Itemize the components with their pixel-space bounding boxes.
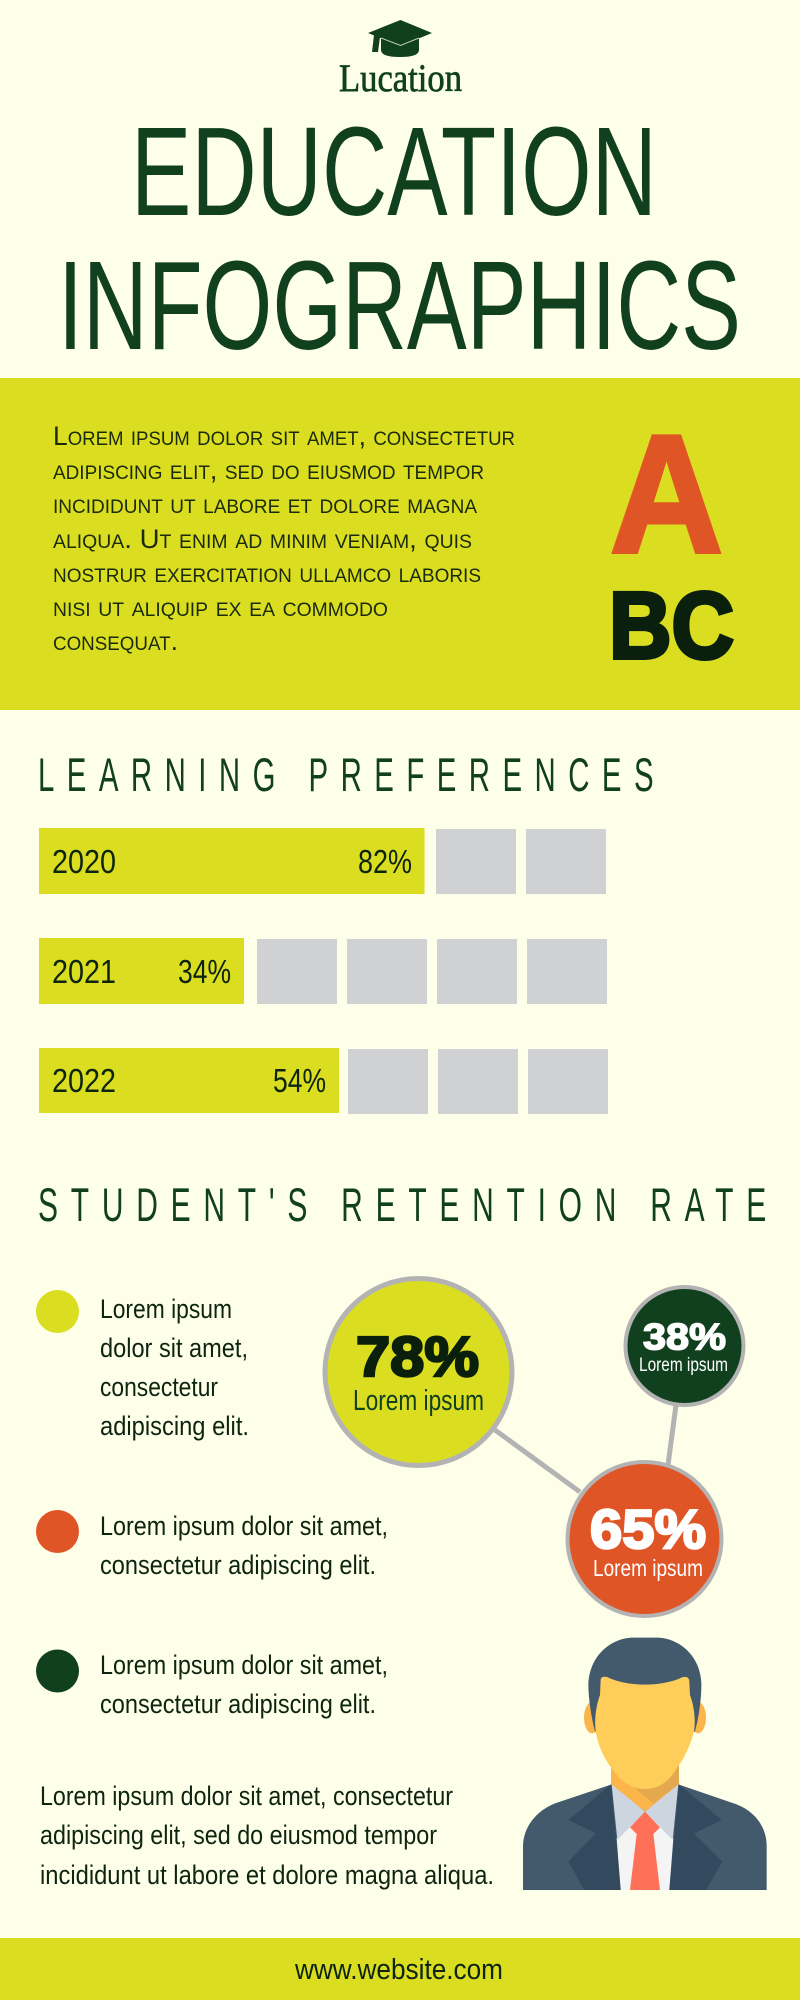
bubble 65% bbox=[568, 1462, 722, 1616]
legend item: yellow: dolor sit amet, bbox=[100, 1333, 248, 1363]
bubble 65%: Lorem ipsum bbox=[593, 1555, 703, 1581]
intro text block bbox=[53, 421, 515, 656]
legend item: yellow: adipiscing elit. bbox=[100, 1411, 249, 1441]
intro text block: adipiscing elit, sed do eiusmod tempor bbox=[53, 455, 484, 485]
bubble 78%: Lorem ipsum bbox=[353, 1385, 484, 1417]
intro text block: Lorem ipsum dolor sit amet, consectetur bbox=[53, 421, 515, 451]
bar 2021: 2021 bbox=[52, 953, 116, 990]
title bbox=[58, 101, 741, 376]
bubble 78% bbox=[325, 1278, 512, 1466]
legend item: yellow: Lorem ipsum bbox=[100, 1294, 232, 1324]
intro text block: aliqua. Ut enim ad minim veniam, quis bbox=[53, 524, 472, 554]
legend item: dark green: consectetur adipiscing elit. bbox=[100, 1689, 376, 1719]
logo bbox=[339, 20, 462, 100]
website url: www.website.com bbox=[294, 1954, 503, 1986]
bubble 38% bbox=[626, 1287, 744, 1405]
bottom paragraph: incididunt ut labore et dolore magna aliqua. bbox=[40, 1860, 494, 1890]
legend item: orange: consectetur adipiscing elit. bbox=[100, 1550, 376, 1580]
legend item: orange bbox=[36, 1510, 388, 1580]
panel: intro band bbox=[0, 378, 800, 710]
legend item: orange: Lorem ipsum dolor sit amet, bbox=[100, 1511, 388, 1541]
bottom paragraph: adipiscing elit, sed do eiusmod tempor bbox=[40, 1820, 437, 1850]
letters BC: BC bbox=[609, 573, 734, 679]
logo name: Lucation bbox=[339, 57, 462, 100]
bar 2022: 2022 bbox=[52, 1062, 116, 1099]
bubble 38%: Lorem ipsum bbox=[639, 1355, 728, 1376]
bottom paragraph: Lorem ipsum dolor sit amet, consectetur bbox=[40, 1781, 453, 1811]
bar 2020: 82% bbox=[358, 843, 412, 880]
legend item: dark green: Lorem ipsum dolor sit amet, bbox=[100, 1650, 388, 1680]
bar 2020: 2020 bbox=[52, 843, 116, 880]
intro text block: consequat. bbox=[53, 626, 178, 656]
legend item: dark green bbox=[36, 1650, 388, 1719]
icon: graduation cap bbox=[368, 20, 432, 57]
bubble 38%: 38% bbox=[643, 1316, 726, 1358]
intro text block: nisi ut aliquip ex ea commodo bbox=[53, 592, 388, 622]
bubble 65%: 65% bbox=[590, 1498, 706, 1560]
bar chart: learning preferences bbox=[39, 828, 608, 1114]
legend bbox=[36, 1290, 388, 1719]
bar 2022 bbox=[39, 1048, 608, 1114]
bar 2020 bbox=[39, 828, 606, 894]
legend item: yellow: consectetur bbox=[100, 1372, 218, 1402]
intro text block: nostrur exercitation ullamco laboris bbox=[53, 558, 481, 588]
icon: businessman bbox=[523, 1638, 767, 1890]
letter A: A bbox=[610, 400, 723, 588]
footer bbox=[0, 1938, 800, 2000]
bar 2022: 54% bbox=[273, 1062, 326, 1099]
bar 2021 bbox=[39, 938, 607, 1004]
bar 2021: 34% bbox=[178, 953, 231, 990]
bubble 78%: 78% bbox=[356, 1325, 479, 1389]
legend item: yellow bbox=[36, 1290, 249, 1441]
bubble chart bbox=[325, 1278, 744, 1616]
intro text block: incididunt ut labore et dolore magna bbox=[53, 489, 477, 519]
bottom paragraph bbox=[40, 1781, 494, 1890]
